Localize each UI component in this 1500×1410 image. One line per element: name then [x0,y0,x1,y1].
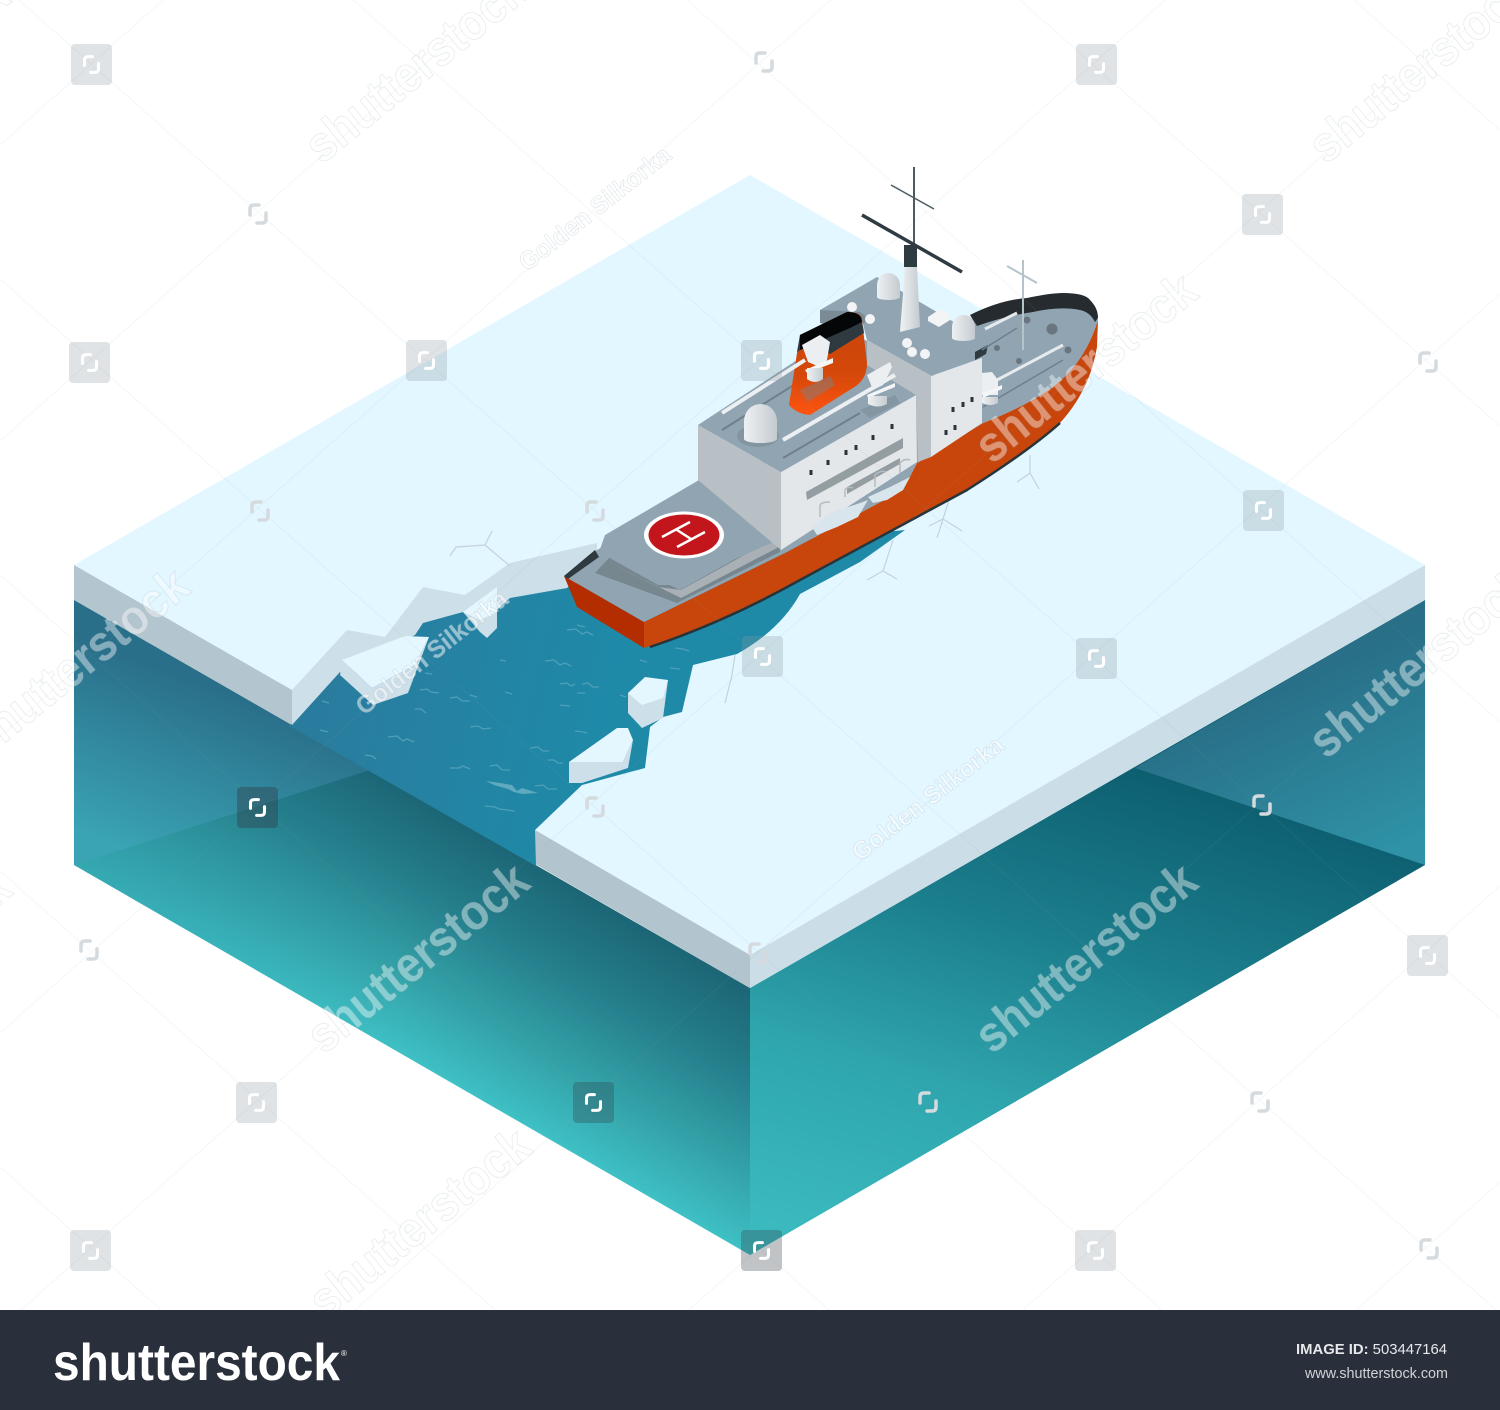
bow bulwark [970,293,1098,326]
radar dome aft [737,404,779,447]
water ripples [320,625,689,811]
crane shadows [800,376,900,418]
bow mast [1007,260,1037,350]
watermark wordmarks: shutterstock [964,851,1207,1064]
second window slit [847,458,900,494]
ice floe 2 [463,587,497,638]
radar dome forward [952,315,975,341]
main mast [862,167,962,332]
ice slab front side [535,830,750,988]
ocean block: left water face [74,600,750,1255]
ice floe 1 [340,636,429,705]
registered mark: ® [341,1349,347,1358]
footer bar [0,1310,1500,1410]
open water channel [290,530,905,866]
watermark wordmarks: shutterstock [296,851,539,1064]
aft port crane [722,335,833,413]
ice cracks [450,455,1039,703]
aft superstructure [698,340,917,550]
radar dome mid [877,273,900,300]
small deck boxes [847,302,950,359]
stern rail [564,550,599,579]
watermark wordmarks: shutterstock [964,261,1207,474]
forward windows [946,397,972,435]
website: www.shutterstock.com [1304,1366,1448,1382]
ice slab right side [750,565,1425,988]
forward superstructure [820,277,988,462]
watermark author names: Golden Silkorka [350,584,514,721]
watermark author names: Golden Silkorka [513,140,677,277]
stern lower deck [595,535,780,603]
hull side [644,320,1098,648]
helipad deck [599,480,780,585]
watermark wordmarks: shutterstock [298,1116,541,1329]
ice floe 3 [628,677,668,728]
funnel [789,312,867,415]
footer logo: shutterstock [53,1334,340,1392]
hull stern [564,576,644,648]
bow deck fittings [982,313,1072,407]
watermark author names: Golden Silkorka [846,730,1010,867]
watermark author names [350,140,1010,867]
hull waterline [650,423,1060,647]
ice sheet top surface [74,175,1425,955]
long window slit [806,438,903,500]
bridge flag [975,345,988,360]
aft starboard crane [783,362,895,440]
image id: IMAGE ID: 503447164 [1296,1341,1447,1358]
ocean block: right water face [750,600,1425,1255]
helipad H marking [644,512,724,558]
channel left broken ice edge [292,543,597,725]
lifeboats [812,459,910,535]
forward crane [982,372,1002,405]
watermark small swirls [81,53,1437,1258]
icebreaker ship [564,167,1098,648]
ice slab left side [74,565,292,725]
main deck [564,294,1098,622]
aft windows [811,424,892,475]
ice floe 4 [569,728,633,783]
large ripple [486,781,538,794]
